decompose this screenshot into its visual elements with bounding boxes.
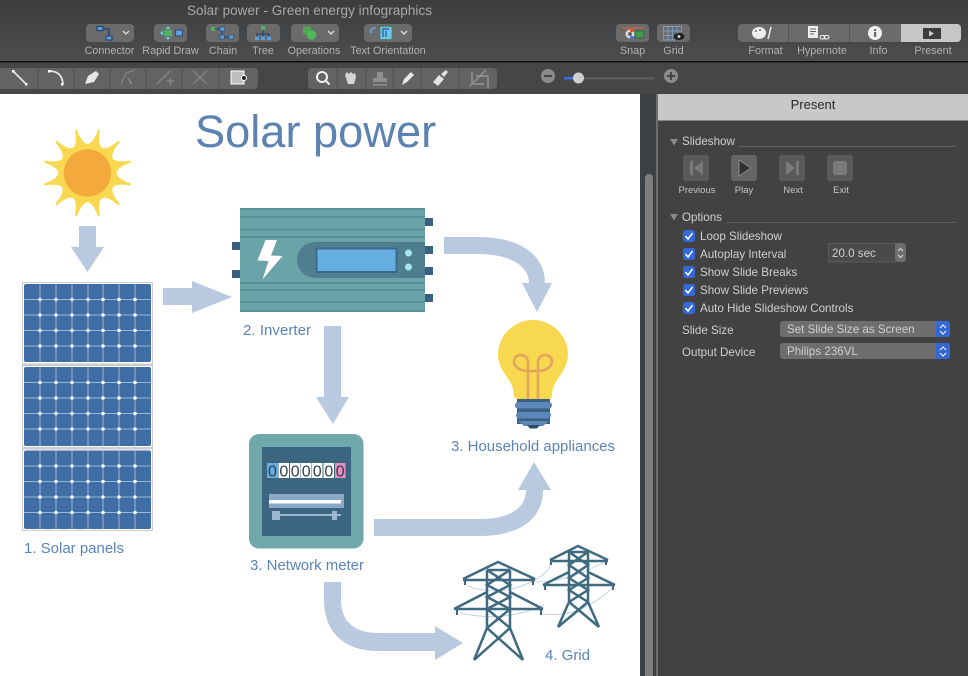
tool: tree: Tree bbox=[252, 45, 274, 57]
arrow: inverter to meter bbox=[316, 326, 349, 424]
button: exit bbox=[827, 155, 853, 196]
icon: sun bbox=[42, 128, 133, 218]
arrow: panels to inverter bbox=[163, 281, 232, 313]
arrow: sun to panels bbox=[71, 226, 104, 272]
tool: rapid draw: Rapid Draw bbox=[142, 45, 199, 57]
input: interval: 20.0 sec bbox=[832, 247, 876, 260]
section: options bbox=[670, 211, 956, 359]
panel: present inspector bbox=[658, 94, 968, 676]
label: inverter: 2. Inverter bbox=[243, 322, 311, 339]
select: output device: Philips 236VL bbox=[787, 345, 858, 358]
icon: hypernote bbox=[808, 26, 829, 39]
panel 1 bbox=[24, 284, 151, 362]
window title: Solar power - Green energy infographics bbox=[187, 3, 432, 18]
button: play: Play bbox=[735, 185, 753, 196]
inspector segmented control: Present bbox=[914, 45, 952, 57]
icon: present bbox=[923, 28, 941, 39]
label: network meter: 3. Network meter bbox=[250, 557, 364, 574]
inspector segmented control: Info bbox=[869, 45, 888, 57]
checkbox: show slide breaks: Show Slide Breaks bbox=[700, 266, 798, 279]
tool: grid: Grid bbox=[663, 45, 684, 57]
app toolbar bbox=[0, 0, 968, 94]
checkbox: auto hide: Auto Hide Slideshow Controls bbox=[700, 302, 854, 315]
view tools group bbox=[308, 68, 497, 89]
panel 3 bbox=[24, 450, 151, 529]
icon: info bbox=[868, 26, 882, 40]
select: output device bbox=[682, 343, 950, 359]
digits bbox=[267, 463, 346, 480]
button: previous: Previous bbox=[679, 185, 716, 196]
icon: tower right bbox=[543, 546, 615, 627]
input: interval bbox=[828, 243, 906, 262]
drawing tools group bbox=[0, 68, 258, 89]
checkbox: loop slideshow: Loop Slideshow bbox=[700, 230, 782, 243]
tool: chain bbox=[206, 24, 239, 57]
canvas strip bbox=[0, 94, 658, 676]
tool: connector: Connector bbox=[85, 45, 135, 57]
tool: connector bbox=[85, 24, 135, 57]
select: slide size: Set Slide Size as Screen bbox=[787, 323, 915, 336]
power lines bbox=[460, 560, 615, 617]
panel: present inspector: Present bbox=[791, 97, 836, 112]
icon: format palette bbox=[752, 27, 771, 39]
label: household appliances: 3. Household appliances bbox=[451, 438, 615, 455]
arrow: meter to grid bbox=[324, 582, 463, 660]
inspector segmented control bbox=[738, 24, 961, 57]
scrollbar bbox=[645, 174, 653, 676]
select: slide size bbox=[682, 321, 950, 337]
button: next: Next bbox=[783, 185, 803, 196]
inverter bbox=[232, 208, 433, 312]
digits: 0 bbox=[279, 464, 288, 480]
icon: tower left bbox=[454, 562, 543, 660]
digits: 0 bbox=[268, 464, 277, 480]
tool: chain: Chain bbox=[209, 45, 237, 57]
tool: operations: Operations bbox=[288, 45, 341, 57]
digits: 0 bbox=[336, 464, 345, 480]
digits: 0 bbox=[302, 464, 311, 480]
panel 2 bbox=[24, 367, 151, 446]
arrow: meter to appliances bbox=[374, 462, 551, 536]
bulb bbox=[498, 320, 568, 428]
section: slideshow: Slideshow bbox=[682, 135, 735, 148]
tool: grid bbox=[657, 24, 690, 57]
select: slide size: Slide Size bbox=[682, 324, 734, 337]
tool: tree bbox=[247, 24, 280, 57]
digits: 0 bbox=[291, 464, 300, 480]
meter bbox=[249, 434, 364, 548]
tool: operations bbox=[288, 24, 341, 57]
checkbox: autoplay interval: Autoplay Interval bbox=[700, 248, 786, 261]
arrow: inverter to appliances bbox=[444, 237, 552, 312]
inspector segmented control: Hypernote bbox=[797, 45, 847, 57]
digits: 0 bbox=[313, 464, 322, 480]
button: previous bbox=[679, 155, 716, 196]
tool: text orientation bbox=[350, 24, 426, 57]
inspector segmented control: Format bbox=[748, 45, 783, 57]
section: options: Options bbox=[682, 211, 722, 224]
title: Solar power bbox=[195, 106, 436, 157]
checkbox: show slide previews: Show Slide Previews bbox=[700, 284, 808, 297]
button: play bbox=[731, 155, 757, 196]
label: solar panels: 1. Solar panels bbox=[24, 540, 124, 557]
button: exit: Exit bbox=[833, 185, 849, 196]
label: grid: 4. Grid bbox=[545, 647, 590, 664]
select: output device: Output Device bbox=[682, 346, 755, 359]
button: next bbox=[779, 155, 805, 196]
solar panels bbox=[22, 282, 153, 530]
tool: text orientation: Text Orientation bbox=[350, 45, 426, 57]
tool: snap bbox=[616, 24, 649, 57]
digits: 0 bbox=[324, 464, 333, 480]
zoom slider bbox=[541, 69, 678, 84]
connectors bbox=[232, 218, 433, 302]
section: slideshow bbox=[670, 135, 956, 196]
tool: snap: Snap bbox=[620, 45, 645, 57]
tool: rapid draw bbox=[142, 24, 199, 57]
